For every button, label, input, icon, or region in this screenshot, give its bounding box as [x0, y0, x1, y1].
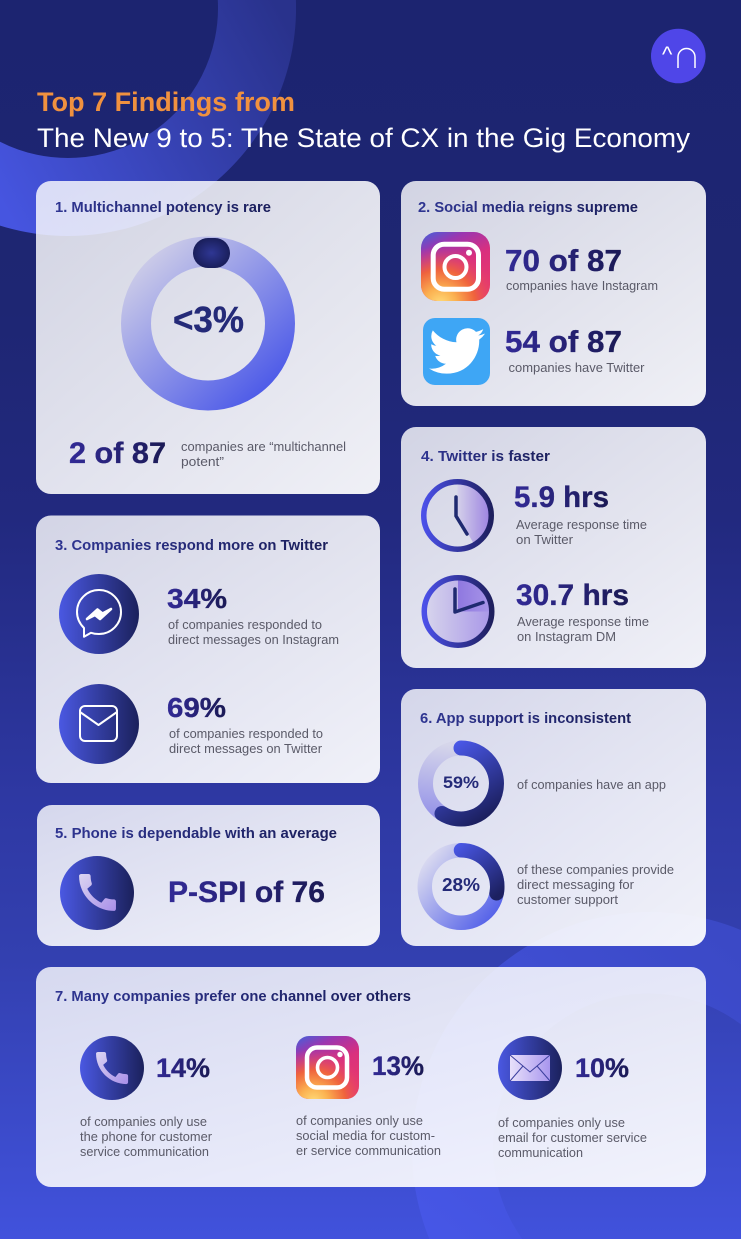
heading 2: 2. Social media reigns supreme	[418, 200, 638, 216]
stat: 10%: 10%	[575, 1053, 629, 1083]
caption twitter time: Average response time	[516, 518, 647, 532]
icon: instagram	[421, 232, 490, 301]
panel: 4 twitter is faster	[401, 427, 706, 668]
caption 10%	[498, 1116, 647, 1160]
heading 7: 7. Many companies prefer one channel over others	[55, 989, 411, 1005]
caption 10%: email for customer service	[498, 1131, 647, 1145]
caption 14%: of companies only use	[80, 1115, 207, 1129]
caption 69%: of companies responded to	[169, 727, 323, 741]
stat: 34%: 34%	[167, 583, 227, 614]
stat: 14%: 14%	[156, 1053, 210, 1083]
caption instagram time: on Instagram DM	[517, 630, 616, 644]
caption 14%	[80, 1115, 212, 1159]
stat: 13%: 13%	[372, 1051, 424, 1081]
stat: 54 of 87: 54 of 87	[505, 324, 622, 359]
icon: instagram small	[296, 1036, 359, 1099]
heading 6: 6. App support is inconsistent	[420, 711, 631, 727]
donut chart: under 3 percent	[136, 238, 280, 396]
title	[37, 87, 691, 153]
caption instagram time: Average response time	[517, 615, 649, 629]
caption twitter time: on Twitter	[516, 533, 573, 547]
caption 34%: direct messages on Instagram	[168, 633, 339, 647]
logo: ^	[662, 42, 673, 67]
icon: clock 5.9 hours	[424, 482, 491, 549]
stat caption: companies are “multichannel	[181, 440, 346, 454]
panel: 1 multichannel potency	[36, 181, 380, 494]
panel: 3 companies respond	[36, 516, 380, 783]
caption 28%: customer support	[517, 893, 619, 907]
caption 34%: of companies responded to	[168, 618, 322, 632]
caption 28%: direct messaging for	[517, 878, 634, 892]
caption twitter: companies have Twitter	[508, 361, 644, 375]
icon: phone small	[80, 1036, 144, 1100]
donut chart: 59%: 59%	[443, 773, 479, 792]
caption 28%	[517, 863, 674, 907]
stat: 70 of 87: 70 of 87	[505, 243, 622, 278]
caption 34%	[168, 618, 339, 647]
caption 13%: er service communication	[296, 1144, 441, 1158]
panel: 7 preferred channel	[36, 967, 706, 1187]
caption 28%: of these companies provide	[517, 863, 674, 877]
heading 5: 5. Phone is dependable with an average	[55, 826, 337, 842]
stat: 69%: 69%	[167, 692, 226, 723]
title: The New 9 to 5: The State of CX in the Gig Economy	[37, 123, 691, 153]
caption 10%: of companies only use	[498, 1116, 625, 1130]
stat: 5.9 hrs: 5.9 hrs	[514, 481, 609, 514]
caption twitter time	[516, 518, 647, 547]
donut chart: 59%	[426, 748, 496, 819]
stat: 30.7 hrs: 30.7 hrs	[516, 579, 629, 612]
stat caption: potent”	[181, 455, 224, 469]
donut chart: 28%: 28%	[442, 875, 480, 895]
icon: twitter	[423, 318, 490, 385]
heading 4: 4. Twitter is faster	[421, 449, 550, 465]
caption 14%: service communication	[80, 1145, 209, 1159]
caption 69%	[169, 727, 323, 756]
icon: messenger	[59, 574, 139, 654]
panel: 5 phone	[37, 805, 380, 946]
heading 1: 1. Multichannel potency is rare	[55, 200, 271, 216]
caption 14%: the phone for customer	[80, 1130, 212, 1144]
icon: envelope	[59, 684, 139, 764]
stat: P-SPI of 76: P-SPI of 76	[168, 876, 325, 909]
panel: 2 social media	[401, 181, 706, 406]
icon: phone	[60, 856, 134, 930]
caption 13%: of companies only use	[296, 1114, 423, 1128]
stat caption	[181, 440, 346, 469]
caption instagram time	[517, 615, 649, 644]
title: Top 7 Findings from	[37, 87, 295, 117]
stat: 2 of 87: 2 of 87	[69, 437, 166, 470]
donut chart: under 3 percent: <3%	[173, 299, 244, 340]
caption 69%: direct messages on Twitter	[169, 742, 322, 756]
caption 10%: communication	[498, 1146, 583, 1160]
caption 13%	[296, 1114, 441, 1158]
donut chart: 28%	[425, 850, 497, 923]
icon: clock 30.7 hours	[424, 578, 492, 646]
caption 59%: of companies have an app	[517, 778, 666, 792]
caption instagram: companies have Instagram	[506, 279, 658, 293]
caption 13%: social media for custom-	[296, 1129, 435, 1143]
icon: envelope small	[498, 1036, 562, 1100]
logo	[651, 29, 706, 83]
heading 3: 3. Companies respond more on Twitter	[55, 538, 328, 554]
panel: 6 app support	[401, 689, 706, 946]
